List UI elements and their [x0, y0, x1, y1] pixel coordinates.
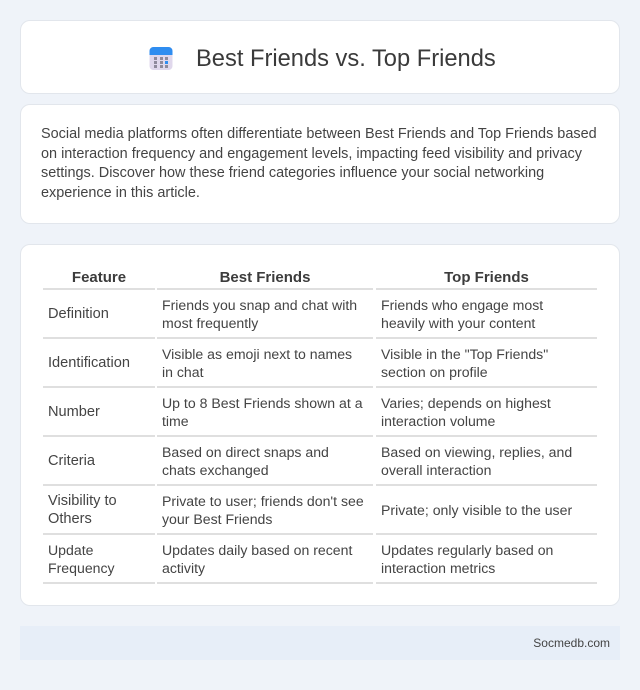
- Number top: Varies; depends on highest: [381, 395, 551, 411]
- row: Update Frequency: Update: [48, 542, 93, 558]
- intro text: experience in this article.: [41, 185, 200, 201]
- intro text: Social media platforms often differentiate between Best Friends and Top Friends based: [41, 126, 597, 142]
- Criteria top: [381, 444, 572, 478]
- row: Update Frequency: Frequency: [48, 560, 115, 576]
- Number best: [162, 395, 363, 429]
- Criteria top: Based on viewing, replies, and: [381, 444, 572, 460]
- footer bar: [20, 626, 620, 660]
- row: Number: Number: [48, 404, 100, 420]
- row: Visibility to Others: Others: [48, 511, 92, 527]
- header panel: [20, 20, 620, 94]
- Identification best: Visible as emoji next to names: [162, 346, 352, 362]
- footer text: Socmedb.com: [533, 636, 610, 650]
- row: Visibility to Others: [48, 493, 117, 527]
- Update best: activity: [162, 560, 205, 576]
- row: Definition: Definition: [48, 306, 109, 322]
- row: Identification: Identification: [48, 355, 130, 371]
- Update best: [162, 542, 352, 576]
- Identification best: in chat: [162, 364, 204, 380]
- Number best: Up to 8 Best Friends shown at a: [162, 395, 363, 411]
- intro panel: [20, 104, 620, 224]
- row: Criteria: Criteria: [48, 453, 95, 469]
- row: Visibility to Others: Visibility to: [48, 493, 117, 509]
- Visibility top: Private; only visible to the user: [381, 502, 572, 518]
- Number top: interaction volume: [381, 413, 495, 429]
- table: [43, 269, 597, 584]
- Number top: [381, 395, 551, 429]
- Definition best: most frequently: [162, 315, 258, 331]
- Criteria best: [162, 444, 329, 478]
- Identification top: section on profile: [381, 364, 488, 380]
- Criteria best: chats exchanged: [162, 462, 269, 478]
- Identification top: Visible in the "Top Friends": [381, 346, 548, 362]
- header: Feature: Feature: [72, 269, 126, 286]
- Update top: Updates regularly based on: [381, 542, 553, 558]
- Number best: time: [162, 413, 189, 429]
- Identification top: [381, 346, 548, 380]
- header: Top Friends: Top Friends: [444, 269, 529, 286]
- intro text: on interaction frequency and engagement levels, impacting feed visibility and privacy: [41, 146, 582, 162]
- Definition best: Friends you snap and chat with: [162, 297, 357, 313]
- table panel: [20, 244, 620, 606]
- header: Best Friends: Best Friends: [220, 269, 310, 286]
- Update best: Updates daily based on recent: [162, 542, 352, 558]
- row: Update Frequency: [48, 542, 115, 576]
- Criteria best: Based on direct snaps and: [162, 444, 329, 460]
- Definition top: heavily with your content: [381, 315, 535, 331]
- Definition best: [162, 297, 357, 331]
- Update top: interaction metrics: [381, 560, 495, 576]
- Visibility best: [162, 493, 364, 527]
- icon: calendar: [150, 47, 172, 70]
- Criteria top: overall interaction: [381, 462, 491, 478]
- title: Best Friends vs. Top Friends: [196, 46, 496, 72]
- Definition top: Friends who engage most: [381, 297, 543, 313]
- intro text: settings. Discover how these friend categories influence your social networking: [41, 165, 544, 181]
- intro text: [41, 126, 597, 201]
- Definition top: [381, 297, 544, 331]
- Update top: [381, 542, 553, 576]
- Visibility best: your Best Friends: [162, 511, 272, 527]
- Visibility best: Private to user; friends don't see: [162, 493, 364, 509]
- Identification best: [162, 346, 352, 380]
